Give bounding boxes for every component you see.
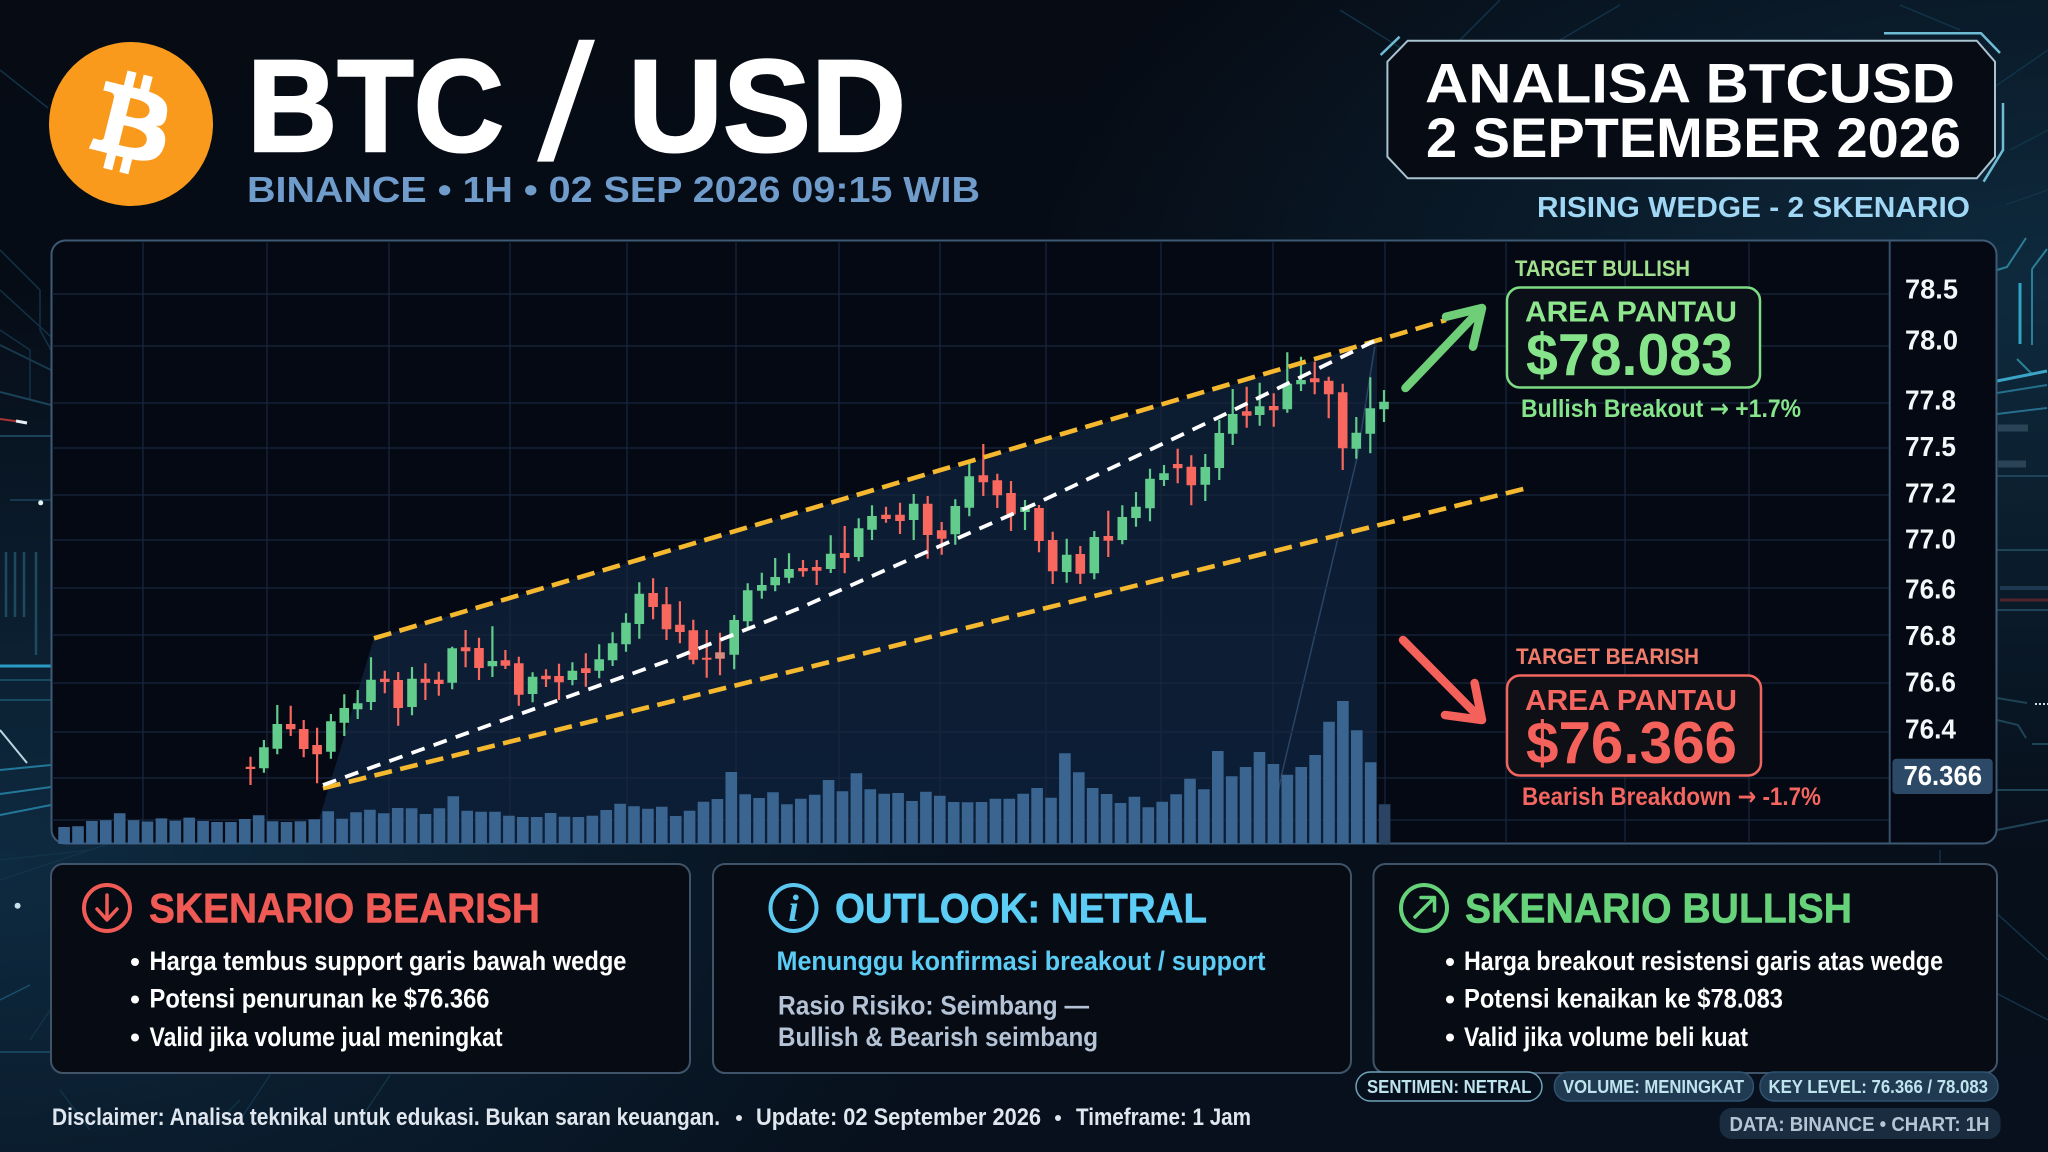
header badge: analisa title: 2 SEPTEMBER 2026: [1426, 106, 1961, 169]
callout: target bearish: $76.366: [1526, 710, 1737, 776]
footer disclaimer: Disclaimer: Analisa teknikal untuk edukasi. Bukan saran keuangan.: [52, 1104, 720, 1131]
bullet list: Valid jika volume jual meningkat: [150, 1022, 503, 1052]
callout: target bearish: AREA PANTAU: [1525, 685, 1737, 717]
price axis labels: 77.8: [1905, 384, 1956, 415]
wedge lower support line: [323, 489, 1525, 788]
icon: info circle: [770, 885, 816, 931]
panel: skenario bearish: [51, 864, 690, 1073]
chip: volume: [1554, 1072, 1753, 1101]
footer disclaimer: [52, 1104, 1251, 1131]
white trend line: [323, 341, 1375, 785]
price axis labels: 76.6: [1905, 573, 1956, 604]
panel: price chart: [52, 240, 1996, 844]
heading: SKENARIO BULLISH: [1465, 884, 1852, 932]
heading: OUTLOOK: NETRAL: [835, 884, 1207, 932]
chip: key level: [1760, 1072, 1998, 1101]
icon: down arrow circle: [84, 885, 130, 931]
chip: data source: DATA: BINANCE • CHART: 1H: [1730, 1114, 1990, 1136]
price axis labels: 78.0: [1905, 324, 1958, 355]
volume bars: [64, 701, 1385, 844]
arrow: bullish: [1406, 308, 1482, 388]
chip: key level: KEY LEVEL: 76.366 / 78.083: [1768, 1077, 1988, 1097]
chip: data source: [1720, 1108, 2001, 1139]
status line: Menunggu konfirmasi breakout / support: [776, 946, 1266, 976]
price axis labels: 76.8: [1905, 620, 1956, 651]
callout: target bullish: TARGET BULLISH: [1515, 256, 1690, 281]
panel: skenario bullish: [1374, 864, 1997, 1073]
chip: volume: VOLUME: MENINGKAT: [1563, 1077, 1744, 1097]
title: [247, 11, 906, 196]
callout: target bullish: Bullish Breakout → +1.7%: [1521, 394, 1801, 423]
price axis labels: 77.5: [1905, 431, 1956, 462]
heading: SKENARIO BEARISH: [149, 884, 540, 932]
footer disclaimer: Timeframe: 1 Jam: [1076, 1104, 1251, 1131]
footer disclaimer: Update: 02 September 2026: [756, 1104, 1041, 1131]
bullet list: [131, 946, 626, 1052]
chip: sentimen: [1356, 1072, 1542, 1101]
candlesticks: [250, 352, 1384, 785]
price axis labels: 76.4: [1905, 713, 1956, 744]
title: /: [537, 11, 596, 196]
pattern subtitle: RISING WEDGE - 2 SKENARIO: [1537, 192, 1970, 224]
panel: outlook netral: [713, 864, 1351, 1073]
header badge: analisa title: [1381, 33, 2003, 182]
callout: target bearish: TARGET BEARISH: [1516, 644, 1699, 669]
price axis labels: 77.2: [1905, 477, 1956, 508]
icon: bitcoin logo: [49, 42, 213, 206]
bullet list: Potensi penurunan ke $76.366: [150, 984, 490, 1014]
title: USD: [628, 32, 906, 179]
subtitle: exchange, timeframe, timestamp: BINANCE • 1H • 02 SEP 2026 09:15 WIB: [247, 169, 980, 210]
bullet list: [1446, 946, 1943, 1052]
price axis labels: 77.0: [1905, 524, 1956, 554]
wedge shaded area: [312, 342, 1377, 843]
callout: target bearish: Bearish Breakdown → -1.7%: [1522, 782, 1821, 811]
arrow: bearish: [1403, 640, 1482, 720]
bullet list: Harga tembus support garis bawah wedge: [150, 946, 626, 976]
wedge upper resistance line: [374, 320, 1446, 638]
callout: target bullish: AREA PANTAU: [1525, 296, 1737, 328]
current price tag: 76.366: [1904, 760, 1982, 791]
title: BTC: [247, 32, 504, 179]
header badge: analisa title: ANALISA BTCUSD: [1425, 52, 1955, 114]
risk ratio text: Rasio Risiko: Seimbang —: [778, 990, 1089, 1020]
bullet list: Potensi kenaikan ke $78.083: [1464, 984, 1783, 1014]
callout: target bullish: [1507, 256, 1801, 423]
icon: up-right arrow circle: [1401, 885, 1447, 931]
risk ratio text: Bullish & Bearish seimbang: [778, 1022, 1098, 1052]
bullet list: Valid jika volume beli kuat: [1464, 1022, 1748, 1052]
price axis labels: [1905, 273, 1958, 744]
callout: target bullish: $78.083: [1526, 322, 1733, 388]
callout: target bearish: [1507, 644, 1821, 811]
chip: sentimen: SENTIMEN: NETRAL: [1367, 1077, 1532, 1097]
price axis labels: 76.6: [1905, 666, 1956, 697]
risk ratio text: [778, 990, 1098, 1052]
icon: info circle: i: [788, 888, 799, 930]
bullet list: Harga breakout resistensi garis atas wedge: [1464, 946, 1943, 976]
price axis labels: 78.5: [1905, 273, 1958, 304]
